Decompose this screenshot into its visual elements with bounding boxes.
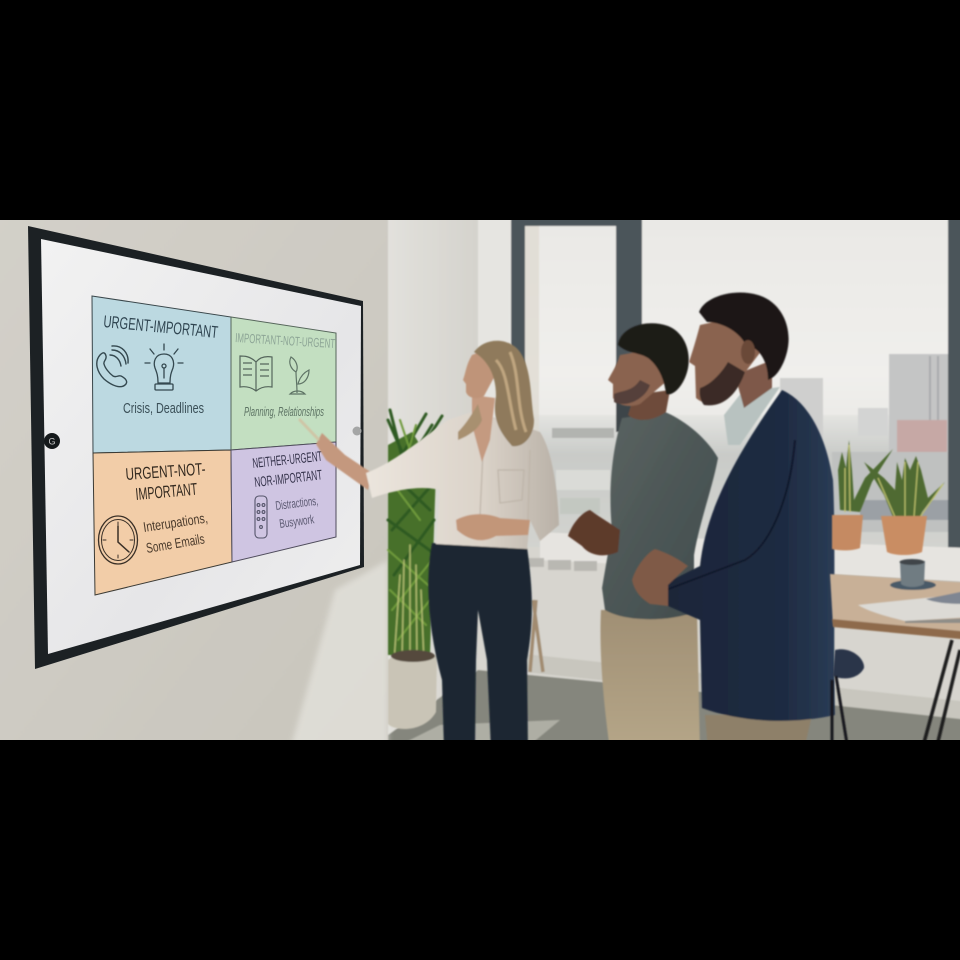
city haze: [525, 415, 955, 547]
person: man in navy blazer: [632, 292, 835, 750]
person: woman presenting: [300, 341, 559, 750]
sweater: [602, 412, 718, 619]
window light on wall: [290, 560, 388, 750]
sky through window: [524, 220, 950, 416]
heading: urgent-important: URGENT-IMPORTANT: [103, 312, 219, 342]
plant foliage mass: [388, 432, 436, 655]
blazer hands: [632, 549, 688, 606]
label: distractions, busywork: [275, 494, 319, 531]
window sill: [540, 532, 960, 582]
label: distractions, busywork: Busywork: [278, 512, 316, 531]
screen display: [41, 239, 361, 654]
man neck: [628, 390, 670, 420]
lower wall under window: [478, 535, 960, 725]
label: crisis, deadlines: Crisis, Deadlines: [123, 400, 204, 417]
label: distractions, busywork: Distractions,: [275, 494, 319, 513]
person: man in grey sweater: [568, 323, 718, 750]
man hair: [618, 323, 689, 394]
woman trousers: [428, 543, 532, 750]
label: interruptions, some emails: [144, 516, 208, 553]
woman face: [463, 348, 498, 398]
screen bezel: [28, 226, 364, 669]
photo scene: [0, 210, 960, 750]
snake plant: left: [832, 440, 893, 550]
city skyline: [525, 354, 955, 547]
pen: [300, 420, 318, 439]
blazer body: [664, 390, 835, 721]
label: planning, relationships: Planning, Relationships: [244, 404, 324, 419]
building: small block: [858, 408, 888, 428]
screen button: left: G: [48, 436, 56, 446]
icon: open book: [240, 356, 272, 391]
building: pink block: [896, 420, 948, 452]
wall: corner column: [388, 210, 480, 750]
city left: [552, 428, 614, 438]
heading: neither-urgent-nor-important: NEITHER-URGENT: [252, 448, 323, 471]
heading: urgent-not-important: [126, 463, 206, 500]
leafy plant with pot: [388, 410, 442, 729]
pot: left: [832, 515, 863, 550]
blouse shading: [480, 430, 530, 520]
window reveal light strip: [524, 226, 539, 426]
floor light patch: [409, 720, 560, 740]
cup and saucer: [890, 559, 936, 590]
quadrant: important-not-urgent: [231, 317, 336, 450]
building: right tower: [888, 354, 949, 450]
woman hair: [474, 341, 534, 446]
woman neck: [472, 395, 495, 462]
floor: [388, 669, 960, 740]
wooden chair behind: [530, 600, 543, 672]
label: interruptions, some emails: Interupations,: [142, 510, 209, 535]
plant pot: [388, 652, 437, 729]
man beard: [614, 380, 650, 404]
quadrant: urgent-not-important: [93, 450, 232, 595]
woman forearm and hand: [316, 433, 372, 490]
man face: [608, 348, 668, 406]
hair highlights: [496, 352, 526, 432]
wall: window reveal: [478, 210, 512, 550]
icon: light bulb: [145, 344, 183, 390]
baseboard: [525, 654, 960, 720]
heading: urgent-not-important: URGENT-NOT-: [125, 459, 206, 484]
screen on wall: [28, 226, 364, 669]
blazer ear: [741, 340, 755, 364]
heading: urgent-not-important: IMPORTANT: [135, 480, 198, 504]
icon: sprout: [290, 357, 309, 394]
heading: neither-urgent-nor-important: NOR-IMPORTANT: [254, 466, 323, 490]
blazer face: [689, 315, 762, 403]
quadrant: neither urgent nor important: [231, 442, 336, 562]
woman hands: [456, 514, 530, 540]
man clasped hands: [568, 510, 620, 555]
desk top: [830, 574, 960, 640]
stool: [832, 649, 864, 750]
radiator vent: [526, 558, 597, 571]
plant foliage: [388, 410, 442, 662]
icon: clock: [98, 516, 138, 564]
desk edge: [832, 619, 960, 640]
wall: left with screen: [0, 210, 388, 750]
label: interruptions, some emails: Some Emails: [145, 530, 206, 556]
blazer sleeve line: [666, 440, 795, 590]
window frame: left and mullion: [511, 210, 960, 550]
heading: important-not-urgent: IMPORTANT-NOT-URGENT: [235, 330, 336, 351]
quadrant: urgent-important: [92, 296, 231, 453]
screen button: right: [352, 426, 362, 436]
shirt collar: [724, 387, 780, 445]
blazer trousers: [705, 715, 812, 750]
icon: phone: [97, 346, 128, 387]
icon: remote control: [255, 496, 267, 538]
desk and snake plants: [830, 440, 960, 750]
building: far tower: [780, 378, 824, 433]
heading: neither-urgent-nor-important: [252, 448, 323, 490]
room background: walls, window and city: [0, 210, 960, 750]
man trousers: [600, 610, 700, 750]
snake plant: right: [864, 456, 945, 555]
pot: right: [881, 516, 927, 555]
papers: [926, 590, 960, 604]
screen button: left: [44, 433, 60, 449]
blazer neck: [735, 360, 772, 408]
blazer hair: [699, 292, 789, 380]
building: low roofs: [832, 452, 950, 532]
desk legs: [922, 640, 960, 750]
blazer beard: [700, 362, 745, 405]
woman blouse: [366, 412, 559, 549]
laptop: [858, 597, 960, 621]
